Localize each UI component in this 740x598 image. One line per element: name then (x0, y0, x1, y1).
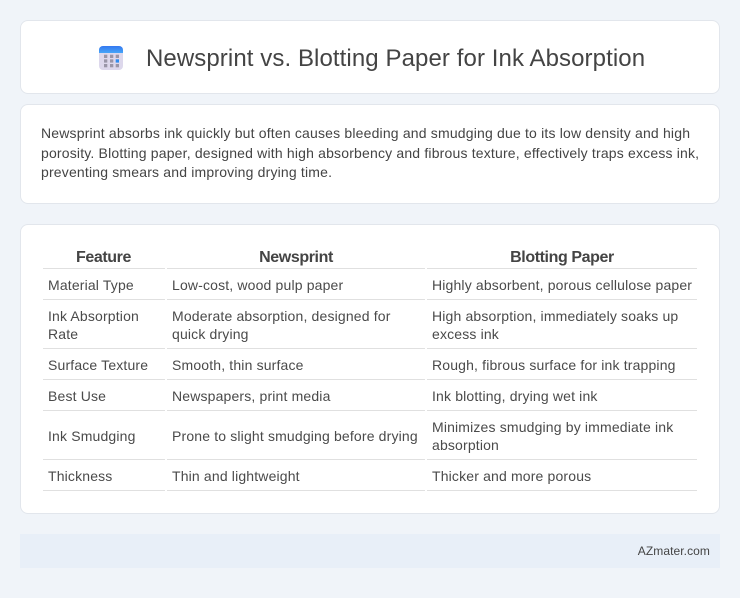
footer credit: AZmater.com (638, 544, 710, 558)
row: thickness: Thickness (48, 468, 112, 484)
row: ink absorption rate (48, 308, 139, 342)
intro text (41, 125, 699, 180)
intro card (20, 104, 720, 204)
comparison table: Smooth, thin surface (172, 357, 304, 373)
row: ink smudging: Ink Smudging (48, 428, 136, 444)
row: best use: Best Use (48, 388, 106, 404)
comparison table: quick drying (172, 326, 249, 342)
comparison table: excess ink (432, 326, 499, 342)
comparison table: Thicker and more porous (432, 468, 591, 484)
comparison table: Ink blotting, drying wet ink (432, 388, 598, 404)
comparison table: Minimizes smudging by immediate ink (432, 419, 673, 435)
row: ink absorption rate: Ink Absorption (48, 308, 139, 324)
footer bar (20, 534, 720, 568)
title: Newsprint vs. Blotting Paper for Ink Absorption (146, 45, 645, 72)
header: newsprint: Newsprint (259, 249, 333, 266)
comparison table: Prone to slight smudging before drying (172, 428, 418, 444)
comparison table: Highly absorbent, porous cellulose paper (432, 277, 692, 293)
comparison table: Low-cost, wood pulp paper (172, 277, 343, 293)
title card (20, 20, 720, 94)
comparison table: Thin and lightweight (172, 468, 300, 484)
comparison table: Rough, fibrous surface for ink trapping (432, 357, 676, 373)
row: material type: Material Type (48, 277, 134, 293)
intro text: porosity. Blotting paper, designed with high absorbency and fibrous texture, effectively traps excess ink, (41, 145, 699, 161)
comparison table: absorption (432, 437, 499, 453)
intro text: Newsprint absorbs ink quickly but often causes bleeding and smudging due to its low density and high (41, 125, 690, 141)
comparison table: Newspapers, print media (172, 388, 331, 404)
comparison table: Moderate absorption, designed for (172, 308, 391, 324)
row: surface texture: Surface Texture (48, 357, 148, 373)
comparison table: High absorption, immediately soaks up (432, 308, 678, 324)
icon: calendar grid (99, 46, 123, 70)
header: feature: Feature (76, 249, 131, 266)
header: blotting paper: Blotting Paper (510, 249, 614, 266)
table card (20, 224, 720, 514)
row: ink absorption rate: Rate (48, 326, 78, 342)
intro text: preventing smears and improving drying time. (41, 164, 332, 180)
